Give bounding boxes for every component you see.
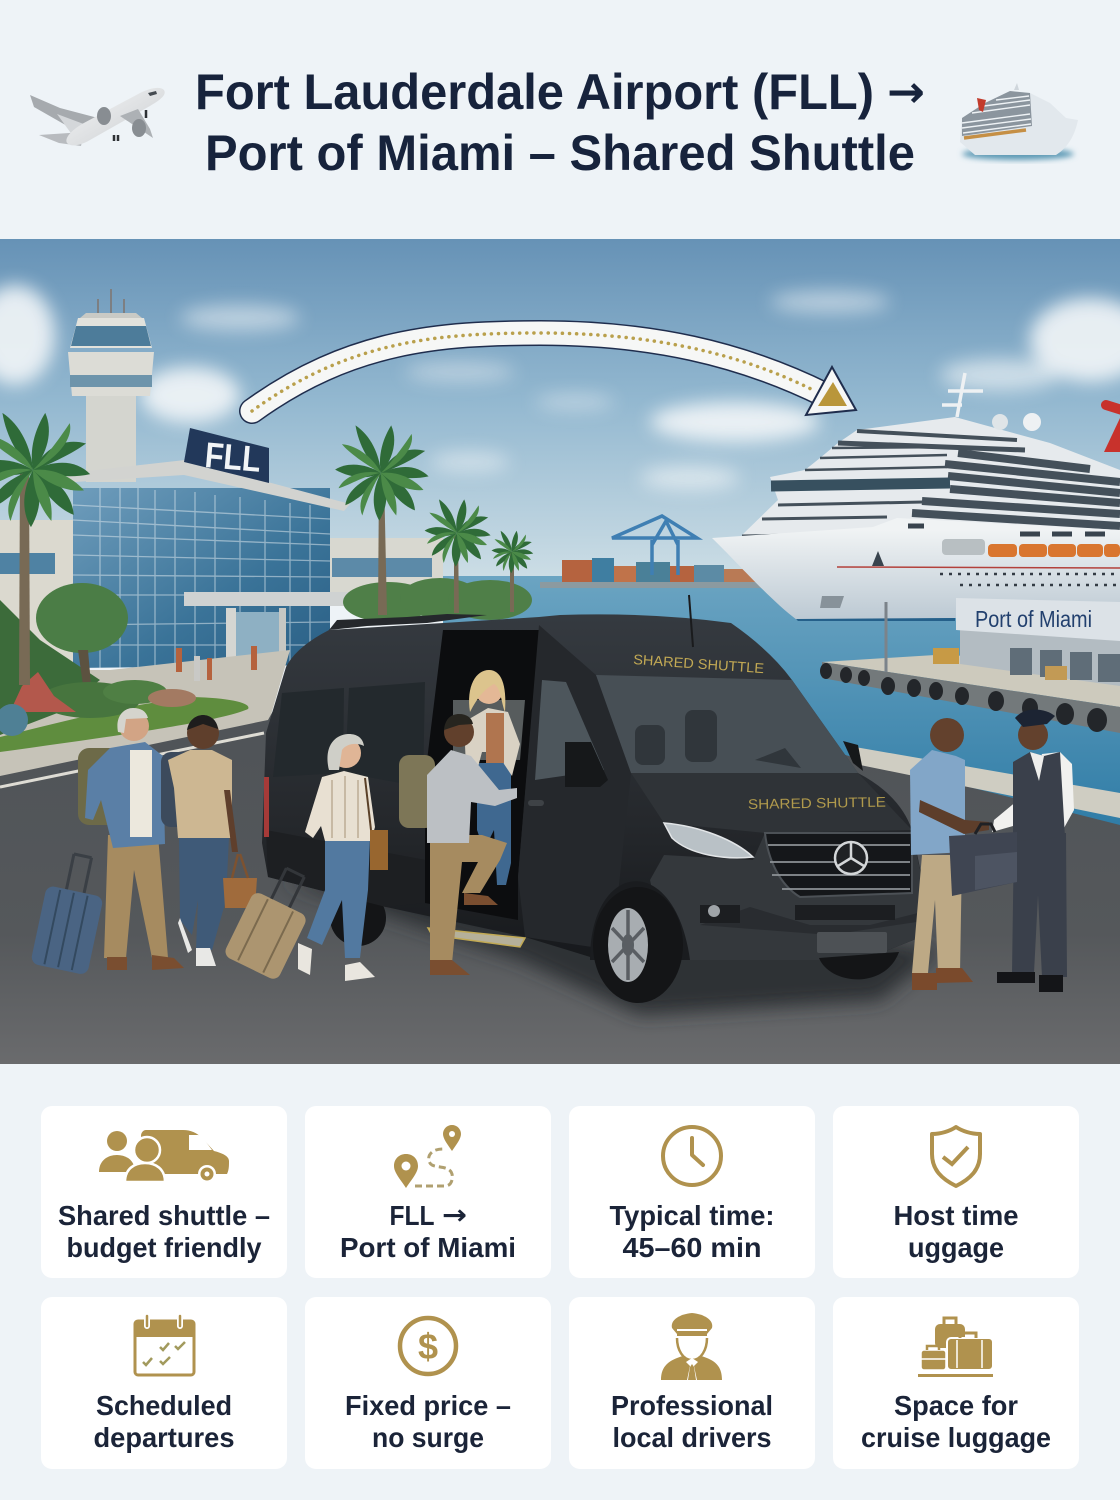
cruise ship — [712, 373, 1120, 621]
card label: budget friendly — [66, 1232, 262, 1263]
card label: 45–60 min — [622, 1232, 762, 1263]
card: scheduled departures — [41, 1297, 287, 1469]
card label: uggage — [908, 1232, 1004, 1263]
route arrow — [252, 333, 856, 415]
man beige tee — [161, 715, 257, 966]
ship funnel — [1104, 405, 1120, 452]
roof lettering: SHARED SHUTTLE — [633, 651, 765, 676]
ship mast and domes — [942, 373, 1041, 431]
card label: Fixed price – — [345, 1390, 511, 1421]
card: professional drivers — [569, 1297, 815, 1469]
card label: Typical time: — [610, 1200, 774, 1231]
headlight — [664, 823, 753, 858]
pedestrians at terminal — [176, 646, 257, 681]
bumper — [700, 907, 930, 935]
front wheel — [593, 887, 683, 1003]
icon: people and van — [99, 1130, 229, 1183]
FLL sign — [184, 428, 269, 483]
shuttle van — [262, 595, 940, 1015]
ship balconies — [742, 431, 1120, 536]
road — [0, 680, 1120, 1064]
container port — [540, 516, 765, 588]
card label: Scheduled — [96, 1390, 232, 1421]
palm 2 — [335, 425, 429, 615]
icon: shield — [932, 1127, 980, 1186]
windshield — [596, 675, 858, 773]
card label — [58, 1200, 270, 1263]
blond woman in doorway — [464, 670, 520, 885]
card label: Port of Miami — [340, 1232, 516, 1263]
card label: no surge — [372, 1422, 484, 1453]
icon: driver — [661, 1313, 722, 1380]
card label — [894, 1200, 1018, 1263]
van body — [262, 614, 931, 1000]
far trees — [343, 578, 532, 622]
card label: Professional — [611, 1390, 773, 1421]
wheel arch — [590, 881, 690, 960]
icon: clock — [663, 1127, 721, 1185]
side mirror — [565, 742, 608, 787]
front fascia — [650, 833, 931, 960]
cab side — [518, 625, 631, 950]
card: fixed price — [305, 1297, 551, 1469]
grille — [765, 833, 912, 897]
suitcase navy — [30, 850, 111, 975]
title: → — [887, 67, 925, 118]
woman silver hair — [298, 734, 388, 981]
title — [195, 64, 925, 181]
palm 3 — [425, 499, 491, 613]
card label: → — [442, 1200, 467, 1231]
rear wheel — [330, 890, 386, 946]
icon: dollar: $ — [418, 1326, 438, 1367]
title: Port of Miami – Shared Shuttle — [205, 125, 915, 181]
icon: luggage — [918, 1318, 993, 1377]
Port of Miami terminal — [956, 598, 1120, 686]
rear windows — [273, 682, 425, 787]
icon: route pins — [394, 1125, 461, 1188]
clouds — [0, 285, 1120, 490]
icon: airplane — [30, 88, 165, 146]
card: typical time — [569, 1106, 815, 1278]
door opening — [425, 630, 539, 920]
door glass — [535, 680, 604, 780]
icon: dollar — [400, 1318, 456, 1374]
antenna — [689, 595, 693, 647]
FLL sign: FLL — [203, 434, 263, 480]
card label: FLL — [390, 1200, 434, 1231]
card label — [345, 1390, 511, 1453]
card label: local drivers — [612, 1422, 772, 1453]
plaza — [0, 650, 290, 778]
card label — [94, 1390, 234, 1453]
card: host time — [833, 1106, 1079, 1278]
control tower — [68, 289, 154, 482]
traveller and driver greeting — [910, 710, 1074, 992]
sea — [443, 576, 1120, 830]
title: Fort Lauderdale Airport (FLL) — [195, 64, 874, 120]
FLL terminal — [0, 460, 364, 670]
hood lettering: SHARED SHUTTLE — [748, 794, 886, 812]
driver with cap — [992, 710, 1074, 992]
card: shared shuttle — [41, 1106, 287, 1278]
palm 1 — [0, 413, 90, 685]
man grey hair — [78, 708, 184, 970]
brown holdall — [223, 878, 257, 908]
card label — [611, 1390, 773, 1453]
lawn and planting — [0, 583, 248, 752]
step — [428, 928, 525, 947]
pier — [820, 602, 1120, 733]
card label: cruise luggage — [861, 1422, 1051, 1453]
tail light — [264, 777, 269, 837]
card label: departures — [94, 1422, 234, 1453]
windscreen seats — [635, 710, 801, 768]
van shadow — [280, 880, 940, 1015]
lower body shade — [266, 830, 426, 907]
ship superstructure — [742, 417, 1120, 535]
palm 4 — [491, 531, 533, 612]
card: route — [305, 1106, 551, 1278]
card label — [610, 1200, 774, 1263]
hand luggage — [949, 824, 1017, 896]
panel: hero illustration — [0, 239, 1120, 1064]
man boarding van — [399, 714, 517, 975]
door handle — [528, 800, 544, 806]
card label — [340, 1200, 516, 1263]
hood — [631, 773, 912, 833]
palm trees — [0, 413, 533, 685]
card label: Space for — [894, 1390, 1018, 1421]
sky — [0, 239, 1120, 599]
card label: Shared shuttle – — [58, 1200, 270, 1231]
right wing of terminal — [330, 538, 443, 593]
card label — [861, 1390, 1051, 1453]
ship hull — [712, 518, 1120, 620]
icon: cruise ship — [960, 83, 1078, 160]
front-right wheel — [819, 952, 899, 979]
panel: feature cards — [41, 1106, 1079, 1469]
icon: calendar — [134, 1316, 195, 1375]
suitcase tan — [223, 860, 323, 981]
road edge lines — [0, 733, 264, 787]
quay kerb — [855, 747, 1120, 818]
traveller blue shirt — [910, 718, 989, 990]
header — [30, 64, 1078, 181]
passenger group — [30, 670, 520, 981]
van roof rack — [329, 614, 487, 630]
card label: Host time — [894, 1200, 1018, 1231]
Port of Miami terminal: Port of Miami — [975, 606, 1092, 632]
card: cruise luggage — [833, 1297, 1079, 1469]
